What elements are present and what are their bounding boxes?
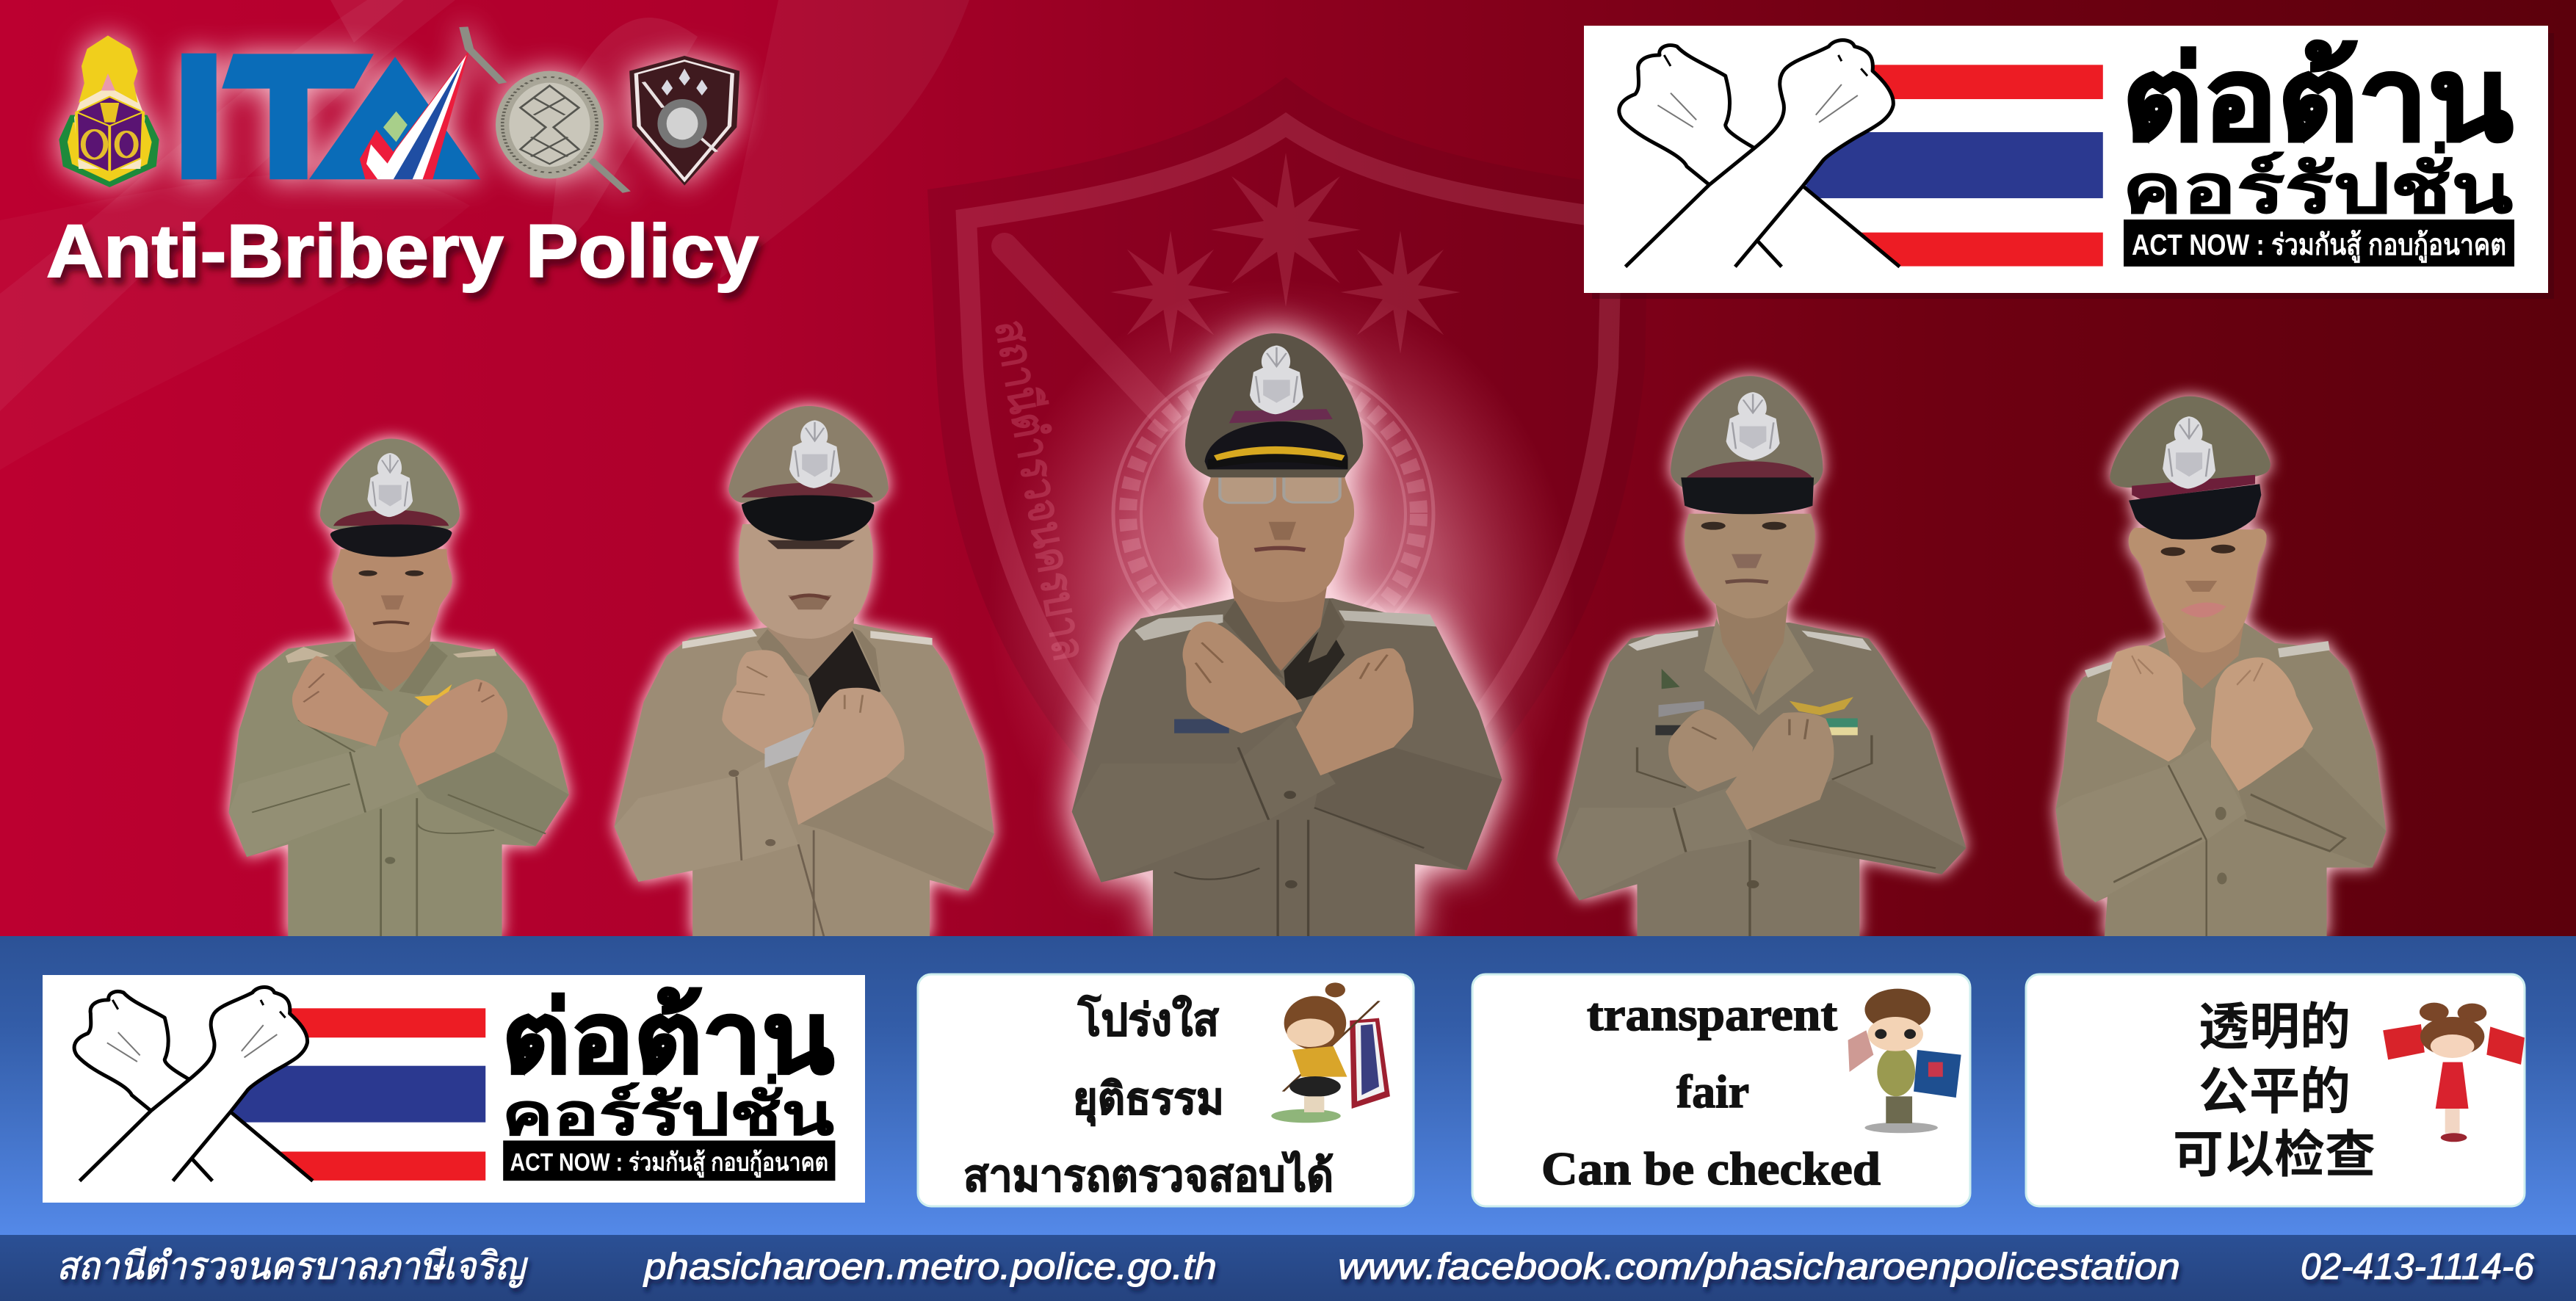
card: Thai values xyxy=(918,974,1414,1206)
card: English values: transparent xyxy=(1587,988,1838,1040)
logo: ITA lettering with flag check mark xyxy=(181,50,480,179)
footer bar xyxy=(0,1235,2576,1301)
footer: facebook: www.facebook.com/phasicharoenpolicestation xyxy=(1338,1246,2180,1287)
logo: royal police crest xyxy=(59,35,159,187)
footer: website: phasicharoen.metro.police.go.th xyxy=(643,1246,1217,1287)
banner subheading: คอร์รัปชั่น xyxy=(2122,141,2513,227)
card: Thai values: โปร่งใส xyxy=(1077,994,1219,1045)
lower banner slogan bar xyxy=(503,1140,835,1181)
footer: station name: สถานีตำรวจนครบาลภาษีเจริญ xyxy=(57,1245,528,1288)
icon: girl with Thai flag xyxy=(1271,982,1390,1123)
title: Anti-Bribery Policy: Anti-Bribery Policy xyxy=(46,209,759,293)
icon: girl with Chinese flags xyxy=(2383,1003,2525,1142)
officer 2 xyxy=(615,406,994,937)
card: Thai values: สามารถตรวจสอบได้ xyxy=(963,1150,1334,1200)
card: English values: fair xyxy=(1676,1065,1749,1117)
icon: boy with flags xyxy=(1848,989,1961,1133)
card: English values: Can be checked xyxy=(1541,1142,1881,1195)
card: Thai values: ยุติธรรม xyxy=(1073,1074,1224,1126)
banner heading: ต่อต้าน xyxy=(2122,35,2513,164)
background swooshes xyxy=(0,0,969,470)
anti-corruption banner, lower left xyxy=(43,975,865,1203)
watermark shield emblem: สถานีตำรวจนครบาล xyxy=(985,316,1095,664)
anti-corruption banner, top right xyxy=(1584,26,2554,299)
anti-corruption banner, top right: ACT NOW : ร่วมกันสู้ กอบกู้อนาคต xyxy=(2132,229,2506,263)
officer 5 xyxy=(2056,396,2386,937)
blue band xyxy=(0,936,2576,1235)
halo behind central officer xyxy=(988,279,1575,940)
officer 3 (centre) xyxy=(1072,333,1502,937)
card: Chinese values: 公平的 xyxy=(2199,1063,2351,1120)
officer 4 xyxy=(1557,376,1966,937)
card: English values xyxy=(1472,974,1970,1206)
footer: phone number: 02-413-1114-6 xyxy=(2301,1246,2534,1287)
anti-corruption banner, lower left: ACT NOW : ร่วมกันสู้ กอบกู้อนาคต xyxy=(510,1148,828,1178)
banner slogan bar xyxy=(2124,220,2514,267)
logo: station shield xyxy=(629,56,739,186)
lower banner subheading: คอร์รัปชั่น xyxy=(502,1074,834,1147)
red background xyxy=(0,0,2576,936)
card: Chinese values xyxy=(2026,974,2525,1206)
watermark shield emblem xyxy=(927,77,1649,940)
officer 1 xyxy=(229,439,569,937)
card: Chinese values: 透明的 xyxy=(2199,999,2351,1055)
logo: silver medallion with sword xyxy=(463,27,626,192)
emblem ring behind central officer xyxy=(1113,360,1433,668)
logo row: ITA and emblems xyxy=(59,27,739,192)
card: Chinese values: 可以检查 xyxy=(2173,1126,2376,1183)
lower banner heading: ต่อต้าน xyxy=(502,982,834,1093)
